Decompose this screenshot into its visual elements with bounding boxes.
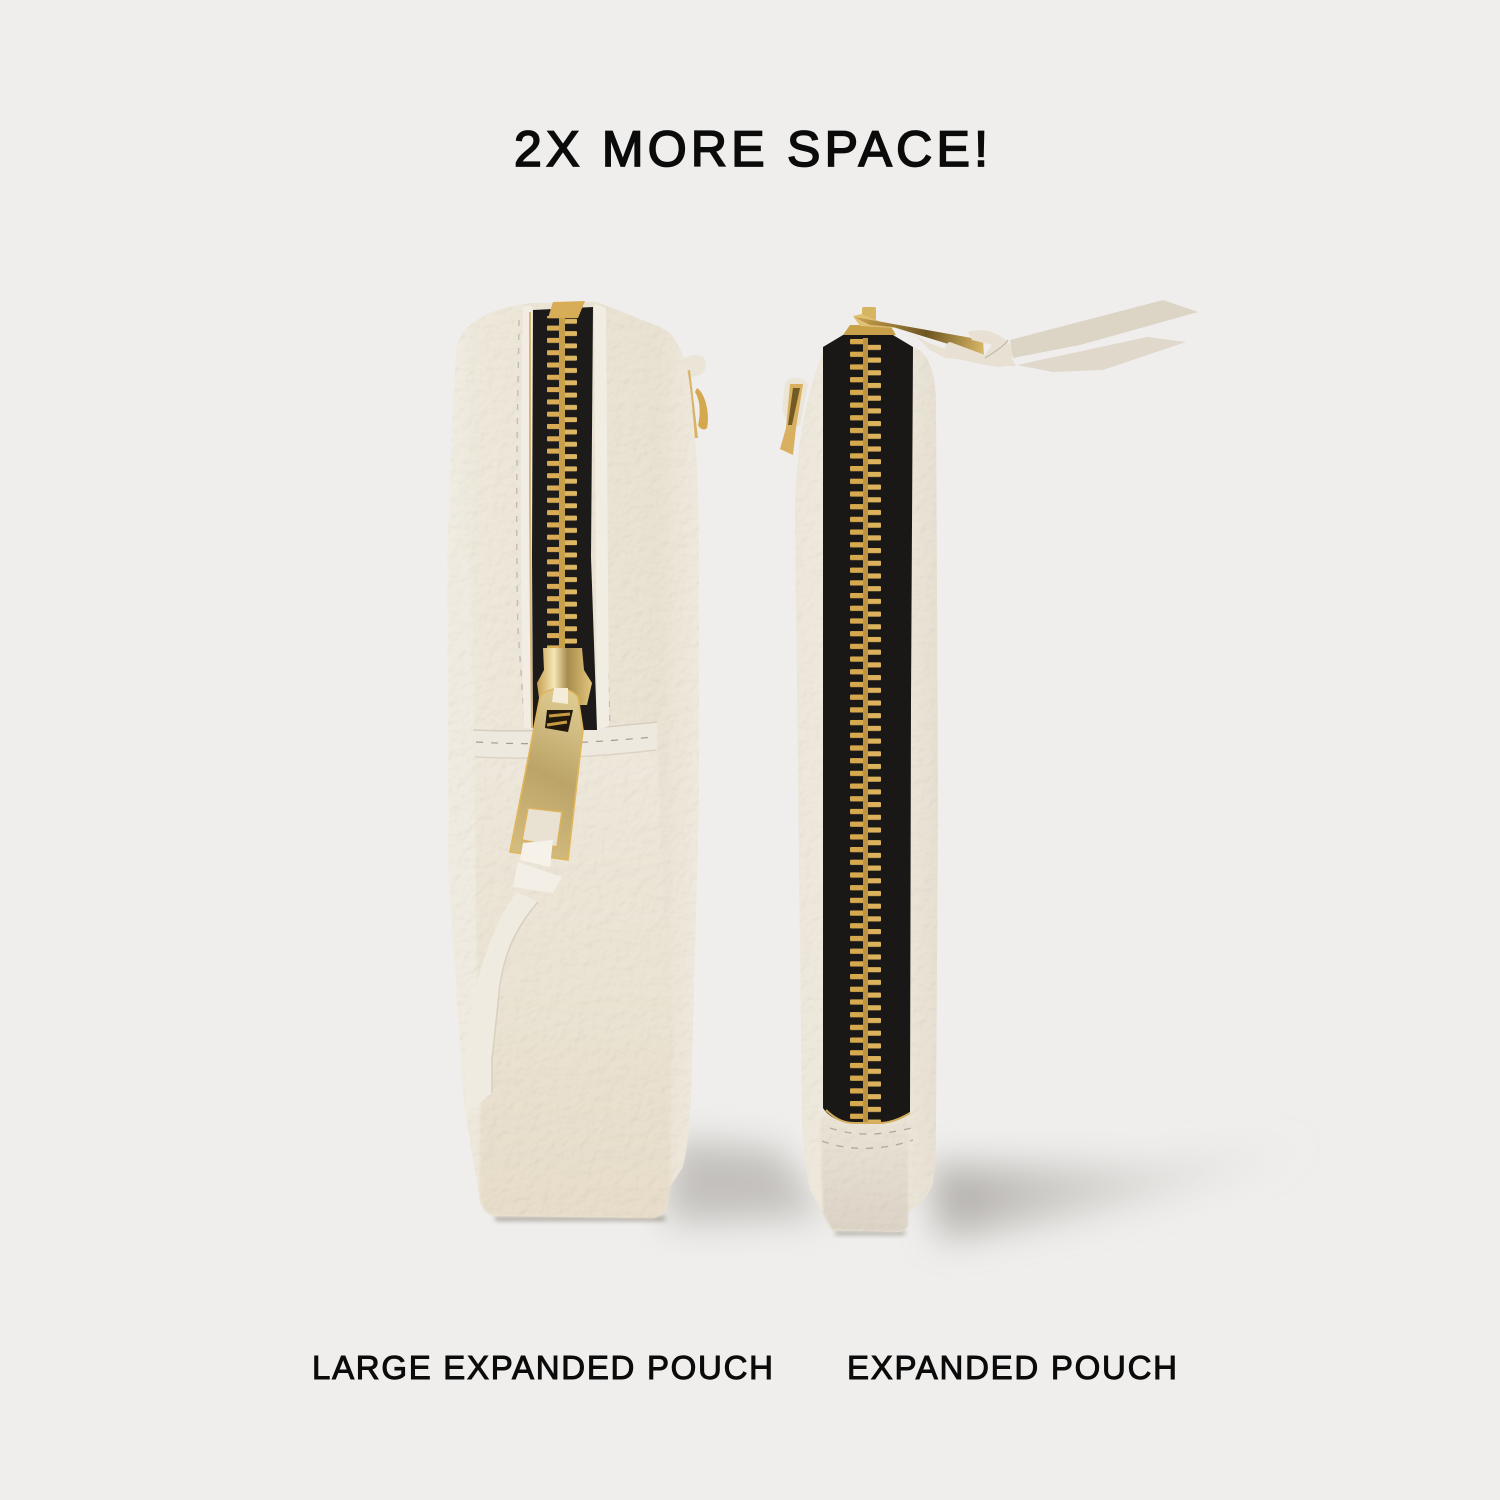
side strip xyxy=(449,553,480,1113)
stitching beside zipper xyxy=(517,320,610,728)
title: 2X MORE SPACE! xyxy=(514,121,988,177)
ground shadows xyxy=(495,1140,1320,1238)
label: expanded pouch: EXPANDED POUCH xyxy=(847,1349,1177,1386)
pocket front panel xyxy=(473,722,672,1218)
pocket seam band xyxy=(473,722,657,758)
zipper tape xyxy=(823,335,913,1122)
end cap stitching xyxy=(822,1128,913,1148)
pouch body silhouette xyxy=(795,335,938,1232)
zipper pull xyxy=(510,688,583,860)
zipper pull bar xyxy=(854,317,984,355)
bottom end cap xyxy=(820,1118,908,1232)
label: large expanded pouch: LARGE EXPANDED POUCH xyxy=(312,1349,773,1386)
pebbled leather texture xyxy=(460,382,699,1213)
pebbled leather texture xyxy=(790,330,945,1235)
pouch body silhouette xyxy=(447,302,699,1218)
zipper lips xyxy=(521,306,532,728)
zipper pull tassel xyxy=(465,840,562,1115)
strap clip on left pouch xyxy=(675,355,708,438)
strap clip on right pouch xyxy=(780,378,808,455)
left pouch: large expanded pouch xyxy=(440,295,710,1225)
leather tails xyxy=(1000,300,1198,372)
zipper tape xyxy=(532,307,597,730)
right pouch: expanded pouch xyxy=(780,300,1198,1235)
leather knot xyxy=(915,330,1012,367)
zipper teeth xyxy=(546,316,578,730)
zipper teeth xyxy=(849,338,882,1122)
zipper slider head xyxy=(537,648,592,705)
zipper slider top xyxy=(843,307,896,335)
